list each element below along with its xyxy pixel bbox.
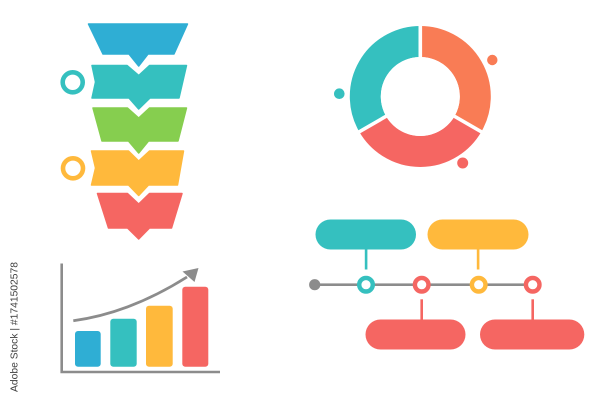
donut segment: orange	[420, 42, 475, 124]
funnel segment: red	[98, 194, 182, 239]
donut segment: red	[373, 124, 468, 151]
timeline start dot	[309, 279, 320, 290]
timeline pill: red right with connector	[480, 299, 584, 350]
funnel segment: teal	[92, 66, 186, 109]
funnel segment: yellow	[92, 151, 184, 196]
timeline	[309, 220, 584, 350]
timeline axis line	[315, 283, 533, 286]
bar: blue	[75, 331, 101, 367]
timeline pill: yellow with connector	[428, 220, 528, 270]
trend arrow	[73, 268, 198, 321]
icon: yellow ring marker	[63, 158, 83, 178]
donut chart	[355, 22, 486, 151]
timeline pill: teal with connector	[316, 220, 416, 270]
bar: red	[182, 287, 208, 367]
donut dot: teal	[334, 88, 345, 99]
timeline pill: red left with connector	[366, 299, 466, 350]
funnel segment: blue	[88, 24, 188, 66]
timeline node: red end	[526, 278, 540, 292]
stock id caption: Adobe Stock | #1741502578	[8, 262, 20, 392]
stacked arrow funnel	[88, 24, 188, 239]
timeline node: yellow	[472, 278, 486, 292]
donut segment: teal	[365, 42, 420, 124]
funnel segment: green	[93, 108, 186, 153]
donut dot: red	[457, 158, 468, 168]
bar chart	[62, 264, 220, 372]
bar: teal	[110, 319, 137, 367]
donut dot: orange	[487, 55, 497, 65]
bar: yellow	[146, 306, 173, 367]
chart axes	[62, 264, 220, 372]
timeline node: teal	[359, 278, 373, 292]
icon: teal ring marker	[63, 72, 83, 92]
timeline node: red	[415, 278, 429, 292]
